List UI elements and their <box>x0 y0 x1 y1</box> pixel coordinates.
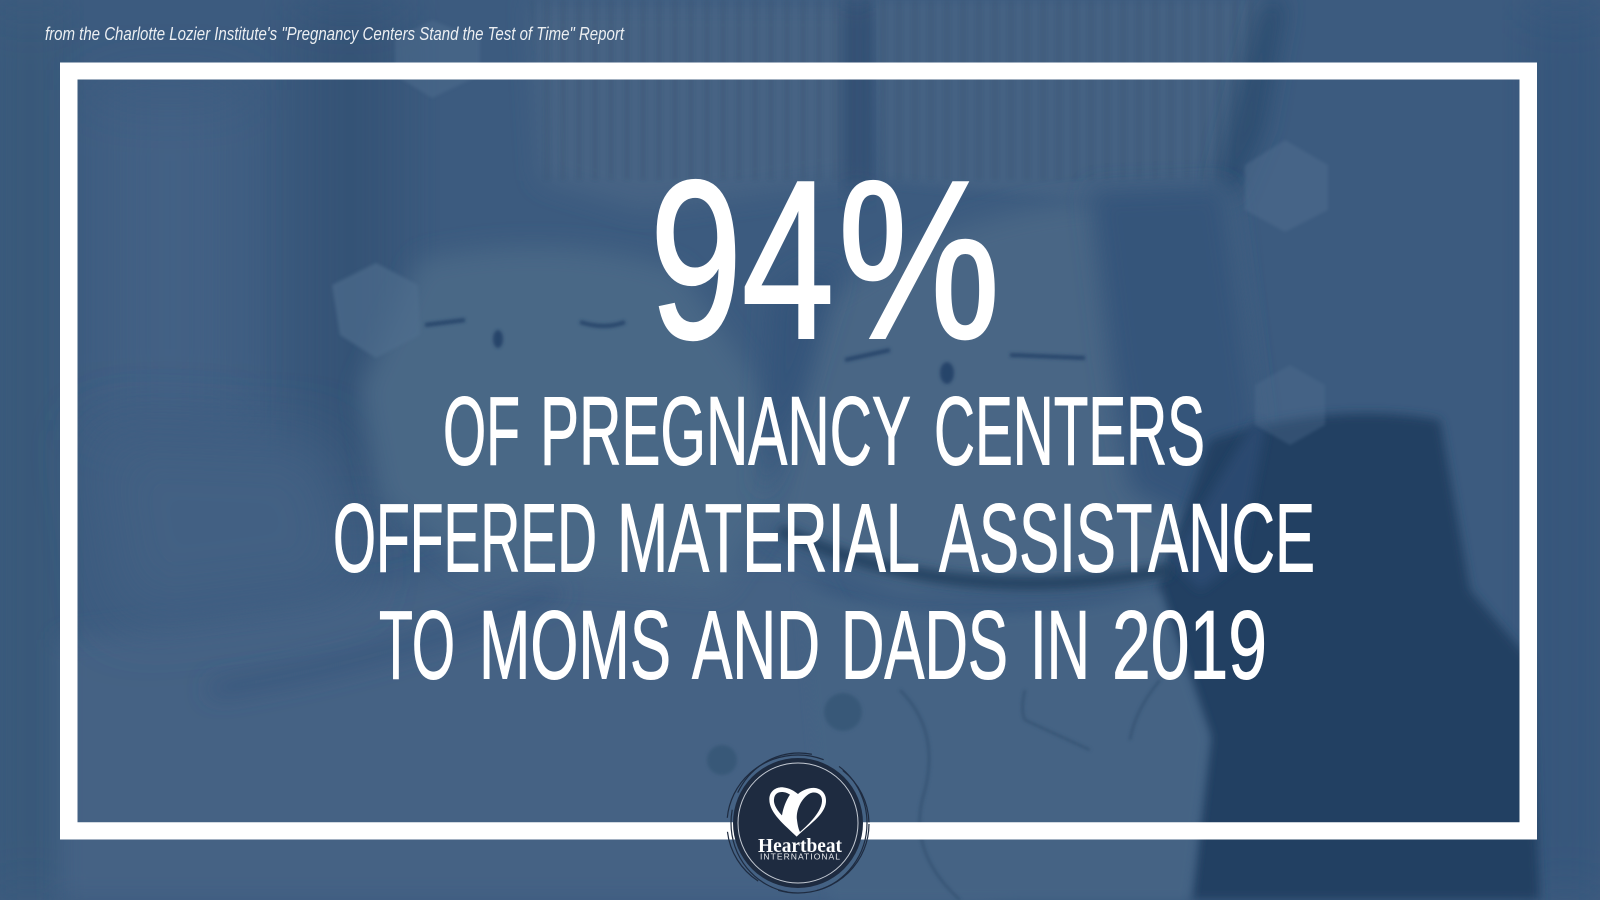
statement line 2: ASSISTANCE <box>939 484 1315 592</box>
statement line 2 <box>333 484 1315 592</box>
statement text <box>333 376 1315 700</box>
statement line 3: AND <box>692 590 820 700</box>
source note: from the Charlotte Lozier Institute's "Pregnancy Centers Stand the Test of Time" Report <box>45 23 625 44</box>
statement line 2: MATERIAL <box>617 484 920 592</box>
dark blanket right <box>1157 413 1540 900</box>
statement line 3: TO <box>379 590 455 700</box>
bokeh lights <box>332 263 420 358</box>
statement line 1: CENTERS <box>934 376 1205 486</box>
sweater drawing lines and buttons <box>900 680 1160 900</box>
headline statistic: 94%: 94 <box>650 134 834 386</box>
right bootie <box>770 190 1255 590</box>
stitched eyes and noses <box>425 320 1085 360</box>
knit sole shadow <box>780 530 1170 583</box>
statement line 3 <box>379 590 1267 700</box>
dim vertical window bands <box>0 0 60 900</box>
folded clothes left <box>60 560 1000 900</box>
statement line 1: OF <box>443 376 520 486</box>
logo wordmark: Heartbeat <box>758 835 842 857</box>
icon: heart <box>769 787 826 837</box>
logo subline: INTERNATIONAL <box>760 852 840 862</box>
white frame <box>60 62 1537 840</box>
statement line 3: MOMS <box>479 590 671 700</box>
logo: Heartbeat International <box>727 753 869 893</box>
statement line 2: OFFERED <box>333 484 597 592</box>
statement line 3: IN <box>1030 590 1090 700</box>
statement line 1: PREGNANCY <box>540 376 911 486</box>
headline statistic: 94%: % <box>838 134 1000 386</box>
sweater <box>800 590 1210 900</box>
statement line 3: DADS <box>841 590 1008 700</box>
statement line 3: 2019 <box>1112 590 1267 700</box>
left bootie <box>360 247 780 590</box>
cuffs <box>530 0 860 210</box>
